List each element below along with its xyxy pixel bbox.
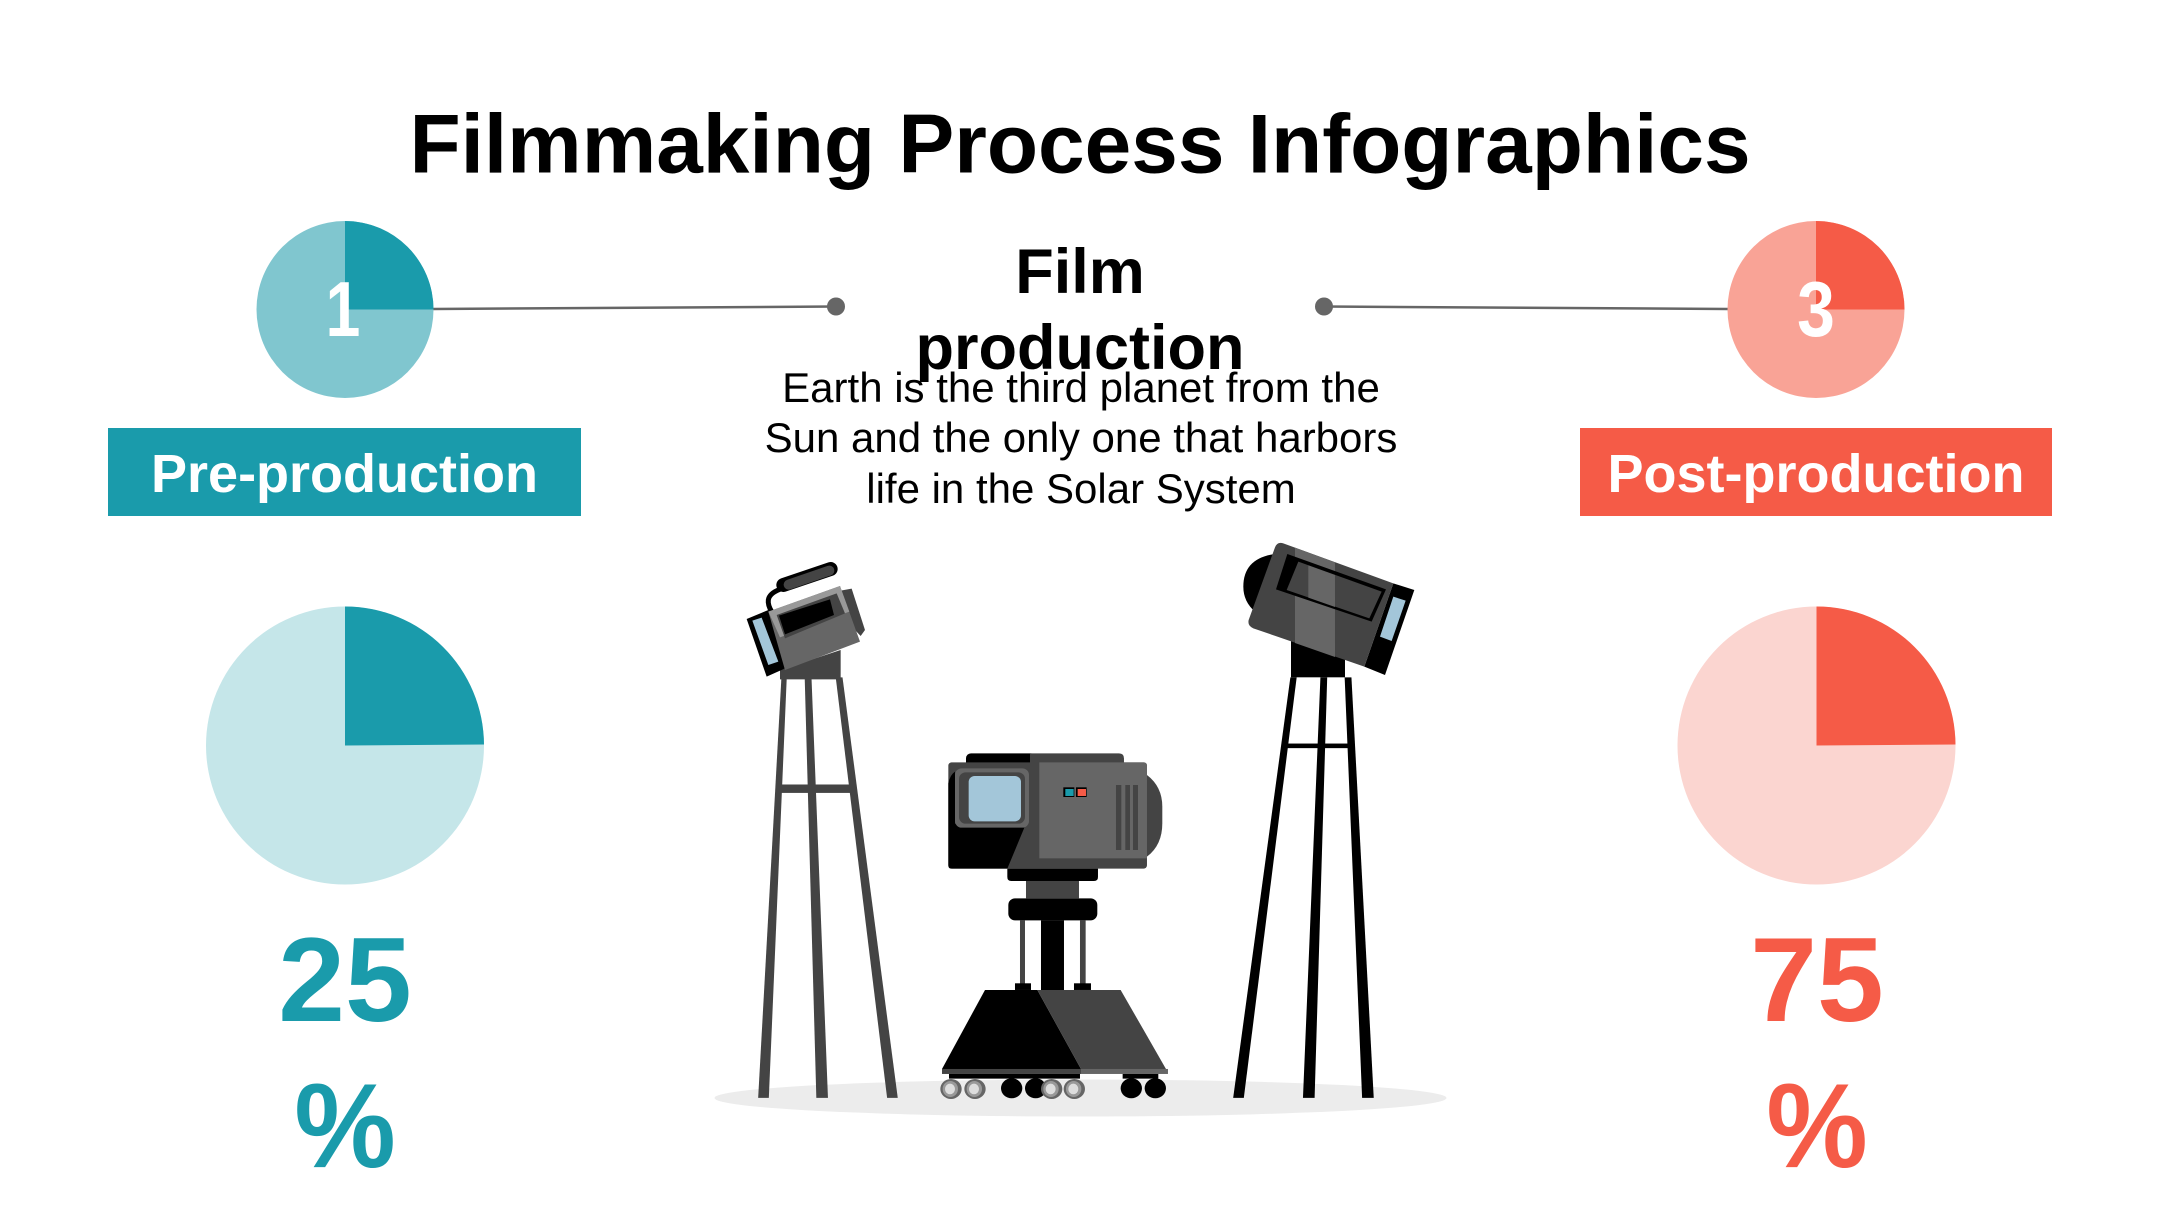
value: 25%	[278, 913, 412, 1193]
heading: film production	[916, 237, 1244, 383]
text block: description	[765, 364, 1397, 512]
step pie: 1	[256, 221, 434, 398]
label: post-production	[1580, 428, 2052, 516]
left camera on tripod	[747, 569, 898, 1098]
connector line: left	[433, 298, 845, 316]
value: 25%: 25	[278, 913, 412, 1047]
value: 25%: %	[294, 1058, 396, 1193]
step pie: 1: 1	[326, 265, 360, 353]
value: 75%: 75	[1750, 913, 1884, 1047]
label: pre-production	[108, 428, 581, 516]
illustration: film cameras	[714, 543, 1446, 1116]
text block: description: Earth is the third planet from the	[782, 364, 1380, 411]
heading: film production: production	[916, 313, 1244, 383]
panel: pre-production	[108, 221, 581, 1193]
pie chart: 75 percent	[1678, 606, 1956, 884]
heading: film production: Film	[1015, 237, 1145, 307]
value: 75%: %	[1766, 1058, 1868, 1193]
floor shadow	[714, 1080, 1446, 1116]
label: pre-production: Pre-production	[151, 444, 538, 504]
right camera on tripod	[1233, 543, 1414, 1098]
step pie: 3	[1728, 221, 1904, 398]
title: Filmmaking Process Infographics	[409, 96, 1751, 190]
panel: post-production	[1580, 221, 2052, 1193]
value: 75%	[1750, 913, 1884, 1193]
label: post-production: Post-production	[1608, 444, 2024, 504]
connector line: right	[1315, 298, 1728, 316]
text block: description: Sun and the only one that harbors	[765, 414, 1397, 461]
center studio camera	[940, 753, 1168, 1099]
pie chart: 25 percent	[206, 606, 484, 884]
text block: description: life in the Solar System	[866, 465, 1296, 512]
step pie: 3: 3	[1797, 267, 1835, 353]
